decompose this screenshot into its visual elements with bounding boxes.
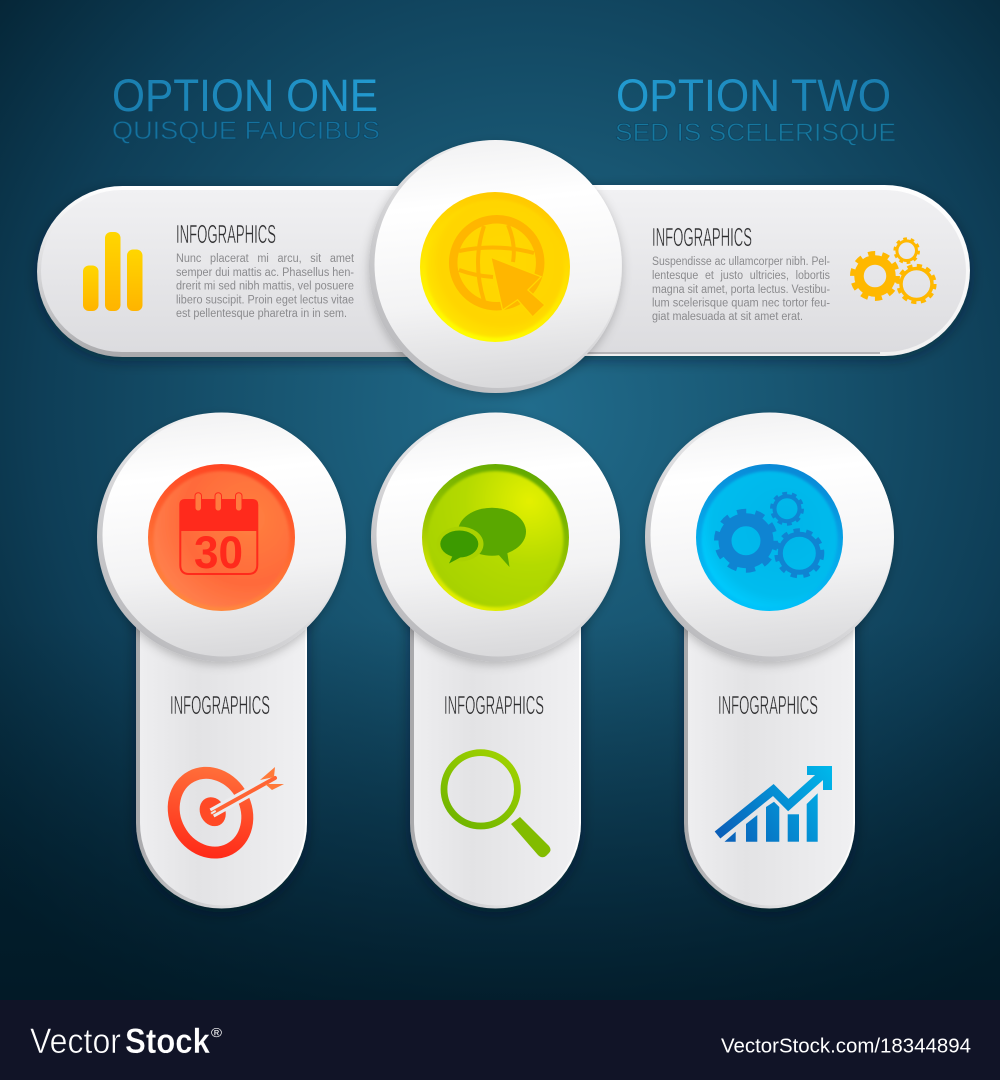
text block: right pill [652, 222, 830, 323]
heading: option two: SED IS SCELERISQUE [615, 119, 896, 147]
panel: right horizontal pill [490, 185, 970, 356]
icon: target with arrow [160, 760, 284, 866]
red ring [148, 464, 295, 611]
button: blue gears [645, 412, 894, 662]
heading: option two: OPTION TWO [616, 70, 891, 121]
icon: growth chart [718, 766, 832, 842]
icon: yellow bars [83, 232, 142, 311]
heading: right column: INFOGRAPHICS [718, 690, 818, 720]
panel: middle column [410, 600, 581, 909]
text block: left pill: drerit mi sed nibh mattis, vel posuere [176, 280, 354, 292]
yellow ring [420, 192, 570, 342]
footer logo: Vector [30, 1022, 121, 1061]
heading: left column: INFOGRAPHICS [170, 690, 270, 720]
text block: left pill [176, 219, 355, 320]
blue ring [696, 464, 843, 611]
green ring [422, 464, 569, 611]
heading: option one [112, 70, 380, 145]
text block: left pill: Nunc placerat mi arcu, sit amet [176, 253, 355, 265]
text block: right pill: magna sit amet, porta lectus. Vestibu- [652, 284, 830, 296]
text block: left pill: semper dui mattis ac. Phasellus hen- [176, 267, 354, 279]
heading: middle column: INFOGRAPHICS [444, 690, 544, 720]
icon: globe with cursor [453, 219, 544, 316]
text block: right pill: Suspendisse ac ullamcorper nibh. Pel- [652, 256, 830, 268]
text block: left pill: est pellentesque pharetra in in sem. [176, 308, 347, 320]
icon: speech bubbles [436, 508, 526, 567]
panel: left column [136, 600, 307, 909]
panel: right column [684, 600, 855, 909]
heading: option two [615, 70, 896, 147]
icon: magnifier [444, 753, 550, 857]
text block: left pill: INFOGRAPHICS [176, 219, 276, 249]
text block: right pill: lum scelerisque quam nec tortor feu- [652, 298, 830, 310]
icon: yellow gears [852, 239, 935, 302]
footer logo: ® [211, 1025, 222, 1040]
footer url: VectorStock.com/18344894 [721, 1036, 971, 1058]
text block: left pill: libero suscipit. Proin eget lectus vitae [176, 294, 354, 306]
text block: right pill: lentesque et justo ultricies, lobortis [652, 270, 830, 282]
footer bar [0, 1000, 1000, 1080]
panel: left horizontal pill [37, 186, 500, 357]
heading: option one: QUISQUE FAUCIBUS [112, 117, 380, 145]
text block: right pill: INFOGRAPHICS [652, 222, 752, 252]
panel: center yellow button [369, 140, 622, 393]
button: red calendar [97, 412, 346, 662]
footer logo [30, 1022, 222, 1061]
icon: calendar [179, 493, 258, 578]
text block: right pill: giat malesuada at sit amet erat. [652, 311, 803, 323]
calendar number: 30 [194, 527, 243, 578]
footer logo: Stock [125, 1022, 210, 1061]
icon: blue gears [716, 493, 822, 576]
button: green speech [371, 412, 620, 662]
heading: option one: OPTION ONE [112, 70, 378, 121]
